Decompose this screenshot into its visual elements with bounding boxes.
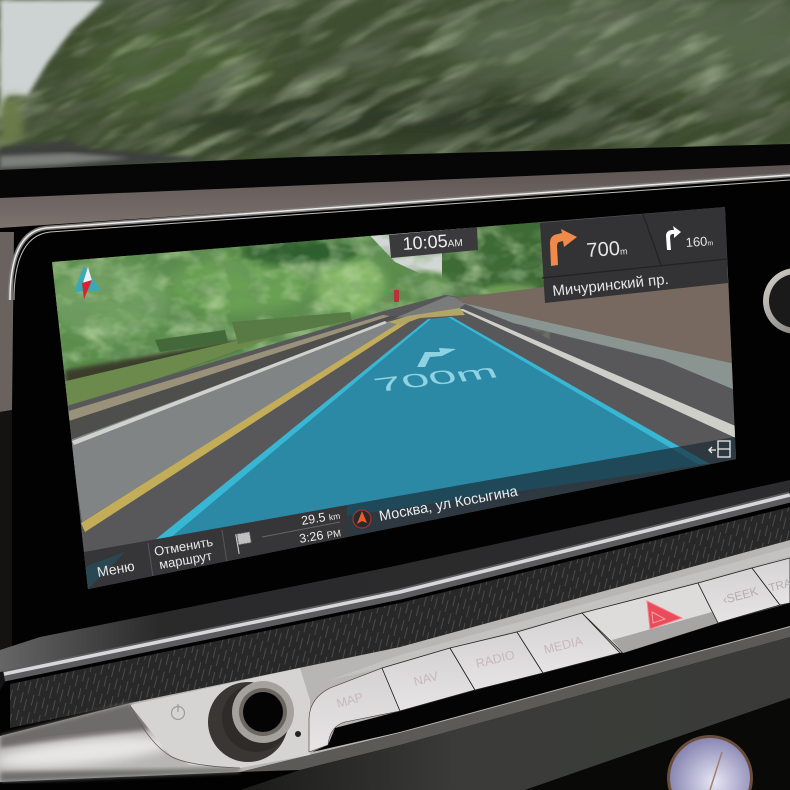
button: MAP bbox=[309, 668, 400, 752]
destination address: Москва, ул Косыгина bbox=[378, 483, 520, 525]
button: hazard bbox=[582, 583, 718, 653]
silver upper bezel edge bbox=[10, 175, 790, 300]
menu label: Меню bbox=[96, 558, 136, 580]
black lower console bbox=[525, 698, 790, 790]
analog clock bbox=[667, 735, 753, 790]
icon: power symbol bbox=[172, 704, 184, 720]
button: SEEK bbox=[698, 568, 780, 623]
black slot under buttons bbox=[312, 603, 790, 752]
lane arrow bbox=[417, 348, 456, 367]
camera: grass and hedge bbox=[65, 336, 278, 410]
bottom info bar bbox=[84, 436, 740, 595]
background: blurred foliage through windscreen bbox=[0, 0, 790, 170]
cancel route label: Отменить bbox=[153, 534, 214, 559]
lower dash leather bbox=[240, 637, 790, 790]
street name: Мичуринский пр. bbox=[552, 271, 669, 300]
wood trim band bbox=[10, 507, 790, 728]
display screen bbox=[52, 207, 736, 589]
camera: road lines bbox=[72, 321, 387, 445]
icon: panel toggle bbox=[709, 441, 730, 457]
camera: sidewalk and road bbox=[68, 295, 736, 589]
icon: destination marker bbox=[353, 510, 371, 528]
button: TRACK bbox=[752, 558, 790, 605]
camera: sky bbox=[360, 228, 460, 278]
icon: next turn arrow bbox=[666, 226, 681, 250]
button: MEDIA bbox=[517, 613, 620, 673]
camera: person bbox=[394, 290, 399, 302]
button: SEEK: ‹SEEK bbox=[721, 584, 760, 607]
silver trim strip bbox=[4, 495, 790, 676]
turn guidance panel bbox=[540, 207, 728, 303]
next turn distance: 160m bbox=[685, 233, 714, 250]
gloss ledge below screen bbox=[0, 480, 790, 672]
bottom info bar: маршрут bbox=[158, 548, 213, 572]
distance to turn: 700m bbox=[586, 237, 628, 262]
lane distance: 700m bbox=[370, 360, 501, 396]
navigation lane overlay bbox=[150, 317, 710, 544]
distance remaining: 29.5 km bbox=[300, 508, 341, 528]
camera: trees bbox=[40, 215, 550, 420]
camera: gravel and curb bbox=[455, 265, 740, 366]
left side trim strip bbox=[0, 232, 14, 690]
button: NAV: NAV bbox=[412, 669, 440, 689]
clock panel: 10:05AM bbox=[402, 230, 463, 254]
button: MAP: MAP bbox=[335, 690, 365, 711]
chrome strip under slot bbox=[240, 627, 790, 772]
button: NAV bbox=[382, 648, 475, 711]
button: RADIO: RADIO bbox=[474, 648, 516, 671]
button: RADIO bbox=[450, 632, 543, 690]
arrival time: 3:26 PM bbox=[298, 525, 342, 546]
silver switch panel bbox=[0, 540, 790, 782]
icon: finish flag bbox=[236, 532, 253, 554]
camera: road base bbox=[40, 200, 750, 600]
rotary knob bbox=[208, 681, 301, 762]
button: MEDIA: MEDIA bbox=[542, 634, 585, 657]
icon: compass bbox=[74, 266, 101, 299]
icon: orange turn arrow bbox=[550, 229, 577, 266]
icon: hazard triangle bbox=[647, 601, 682, 629]
media buttons bbox=[309, 558, 790, 752]
rotary knob at right edge bbox=[763, 268, 790, 334]
clock panel bbox=[389, 227, 478, 258]
